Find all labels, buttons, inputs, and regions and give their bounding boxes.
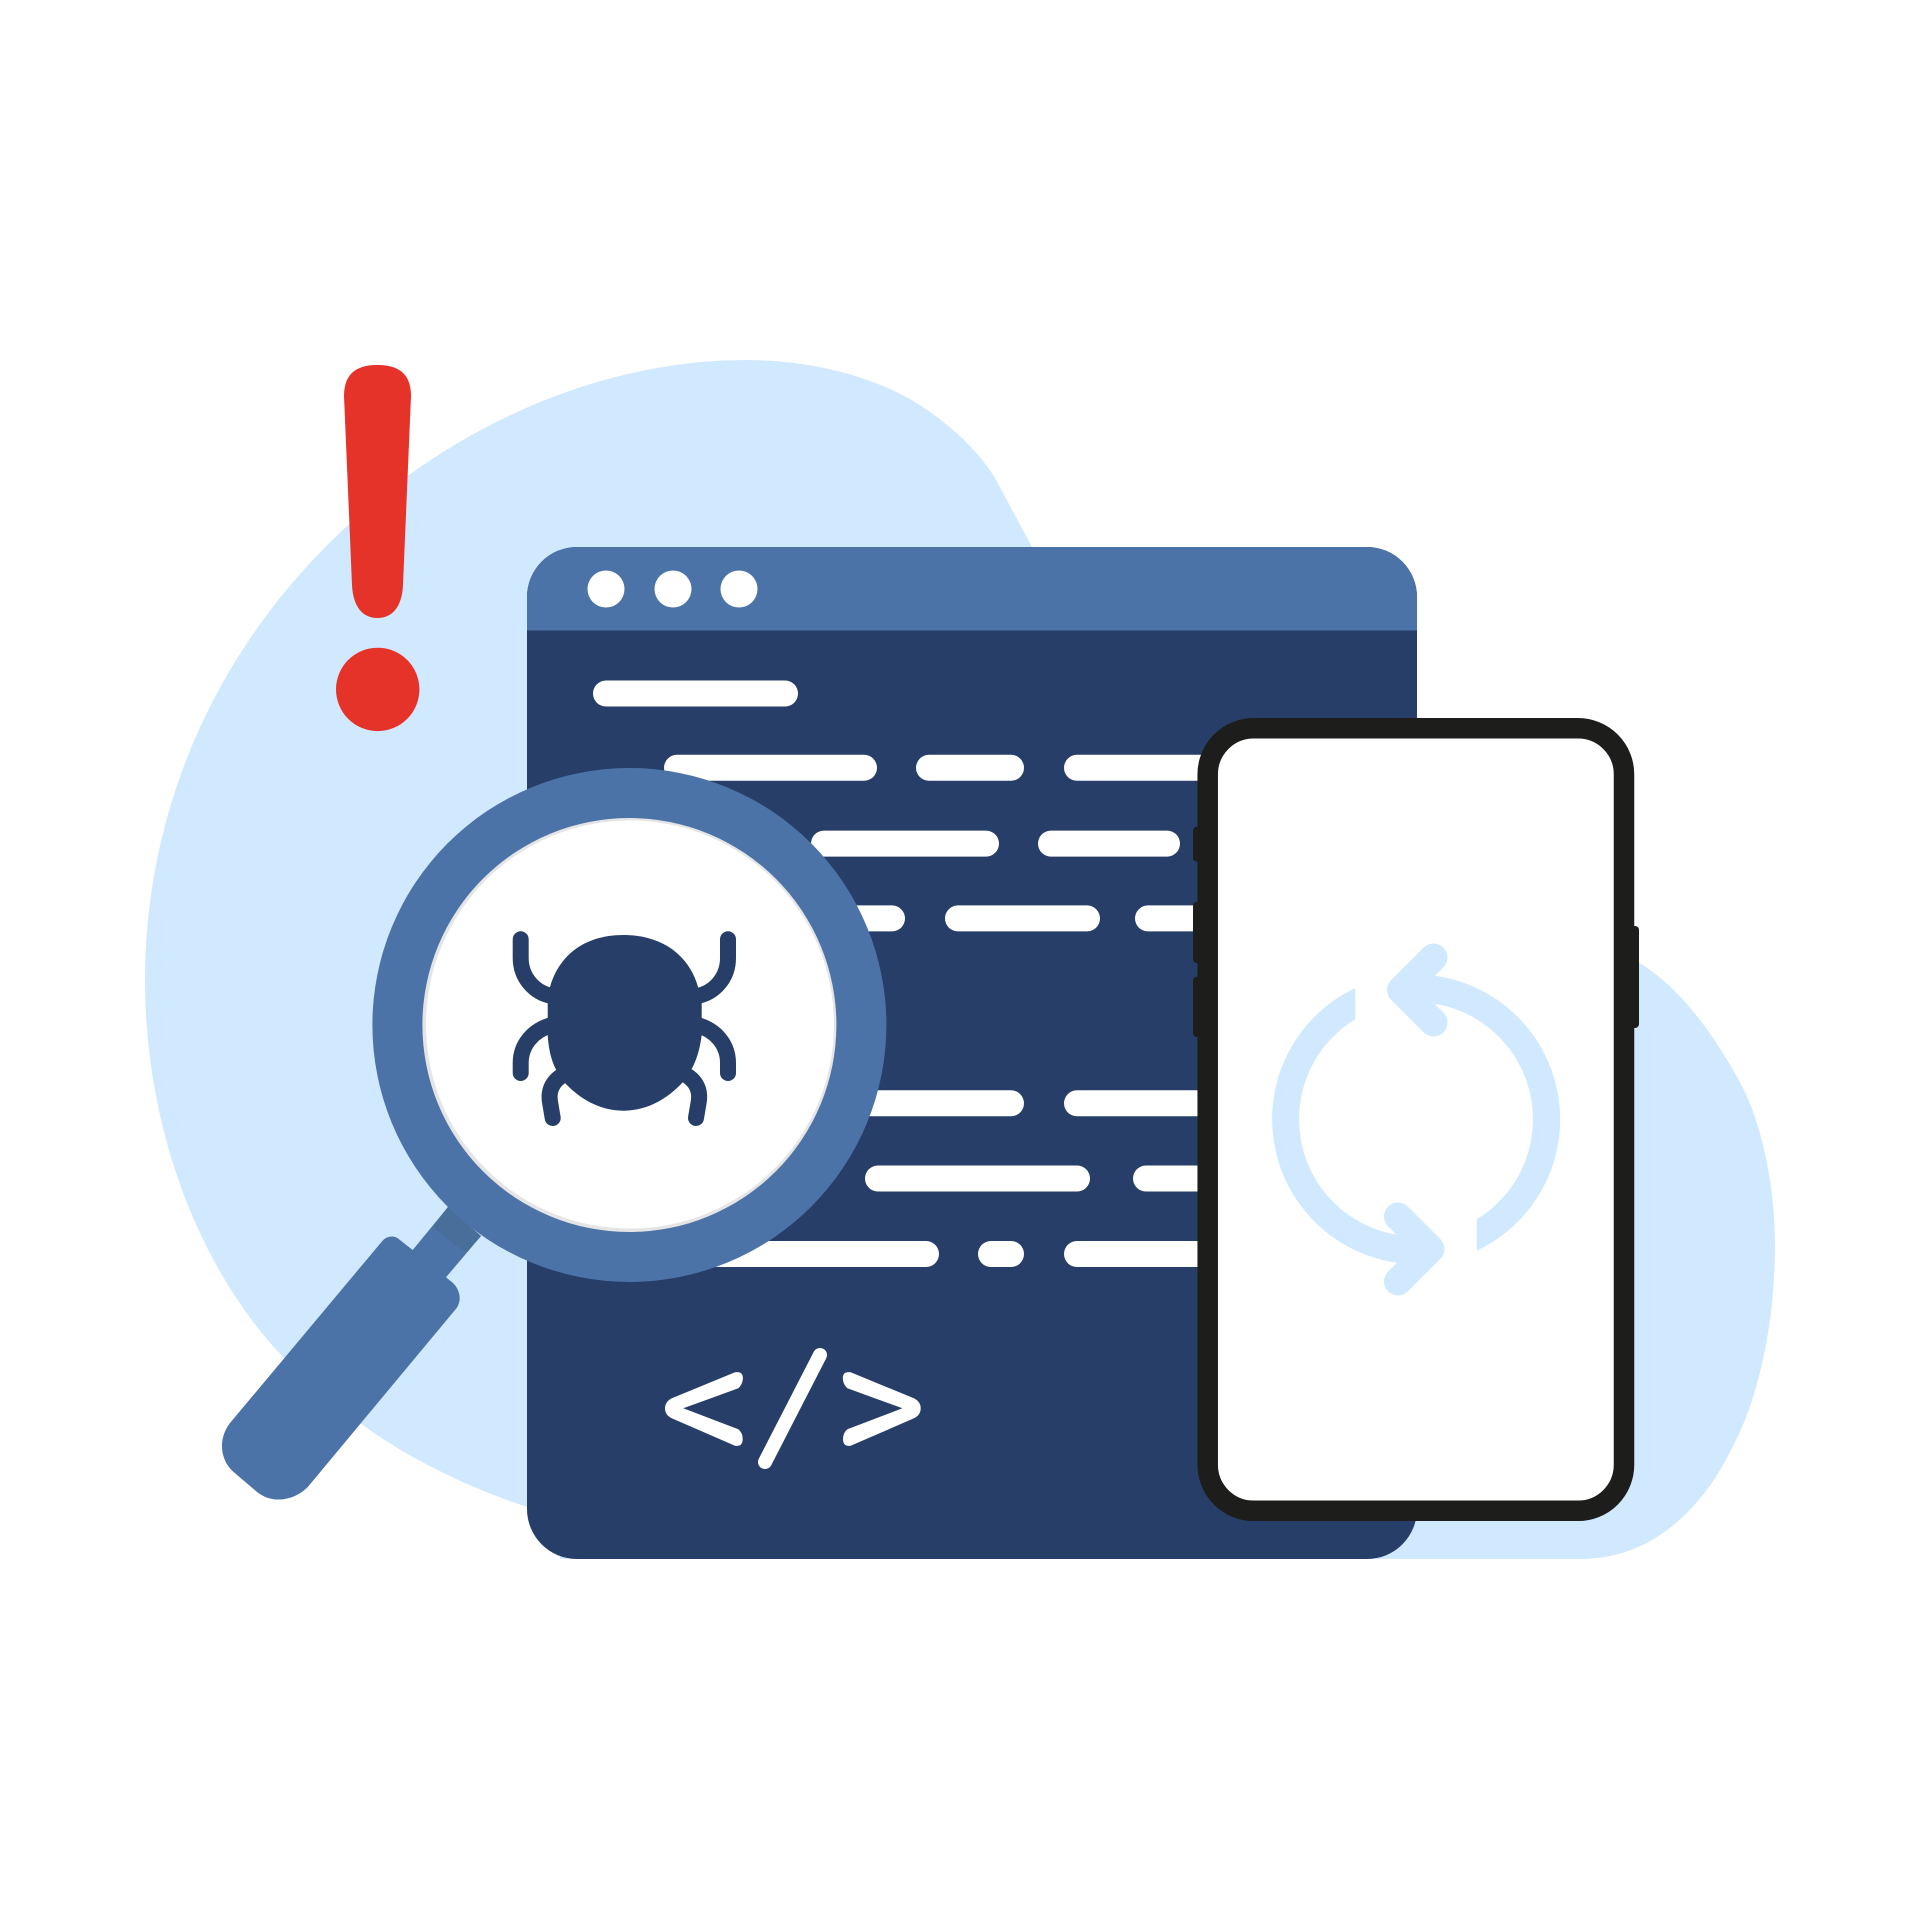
bug body xyxy=(548,935,702,1111)
phone frame and screen xyxy=(1208,728,1624,1511)
exclamation mark xyxy=(336,365,419,731)
exclamation bar xyxy=(344,365,411,618)
sync arc right xyxy=(1400,974,1560,1251)
window header xyxy=(527,547,1417,630)
code lines xyxy=(606,694,1230,1254)
bug legs xyxy=(521,939,728,1118)
slash xyxy=(765,1355,820,1462)
sync arrowhead bottom xyxy=(1398,1216,1430,1282)
phone side buttons xyxy=(1193,827,1639,1037)
sync arrowhead top xyxy=(1401,958,1434,1022)
window control dots xyxy=(588,570,758,608)
magnifying glass xyxy=(222,768,886,1500)
lens glass xyxy=(426,820,834,1228)
sync arc left xyxy=(1272,988,1432,1264)
window body xyxy=(527,547,1417,1559)
smartphone xyxy=(1193,728,1639,1511)
bug icon xyxy=(521,935,728,1118)
lens rim shadow xyxy=(422,818,836,1232)
background blob xyxy=(145,360,1775,1559)
handle xyxy=(222,1207,481,1500)
right angle bracket xyxy=(843,1372,921,1446)
code tag icon xyxy=(665,1355,921,1462)
browser code window xyxy=(527,547,1417,1559)
exclamation dot xyxy=(336,648,419,731)
sync icon xyxy=(1272,958,1560,1282)
lens ring xyxy=(372,768,886,1282)
left angle bracket xyxy=(665,1372,743,1446)
handle collar shadow xyxy=(433,1207,481,1252)
